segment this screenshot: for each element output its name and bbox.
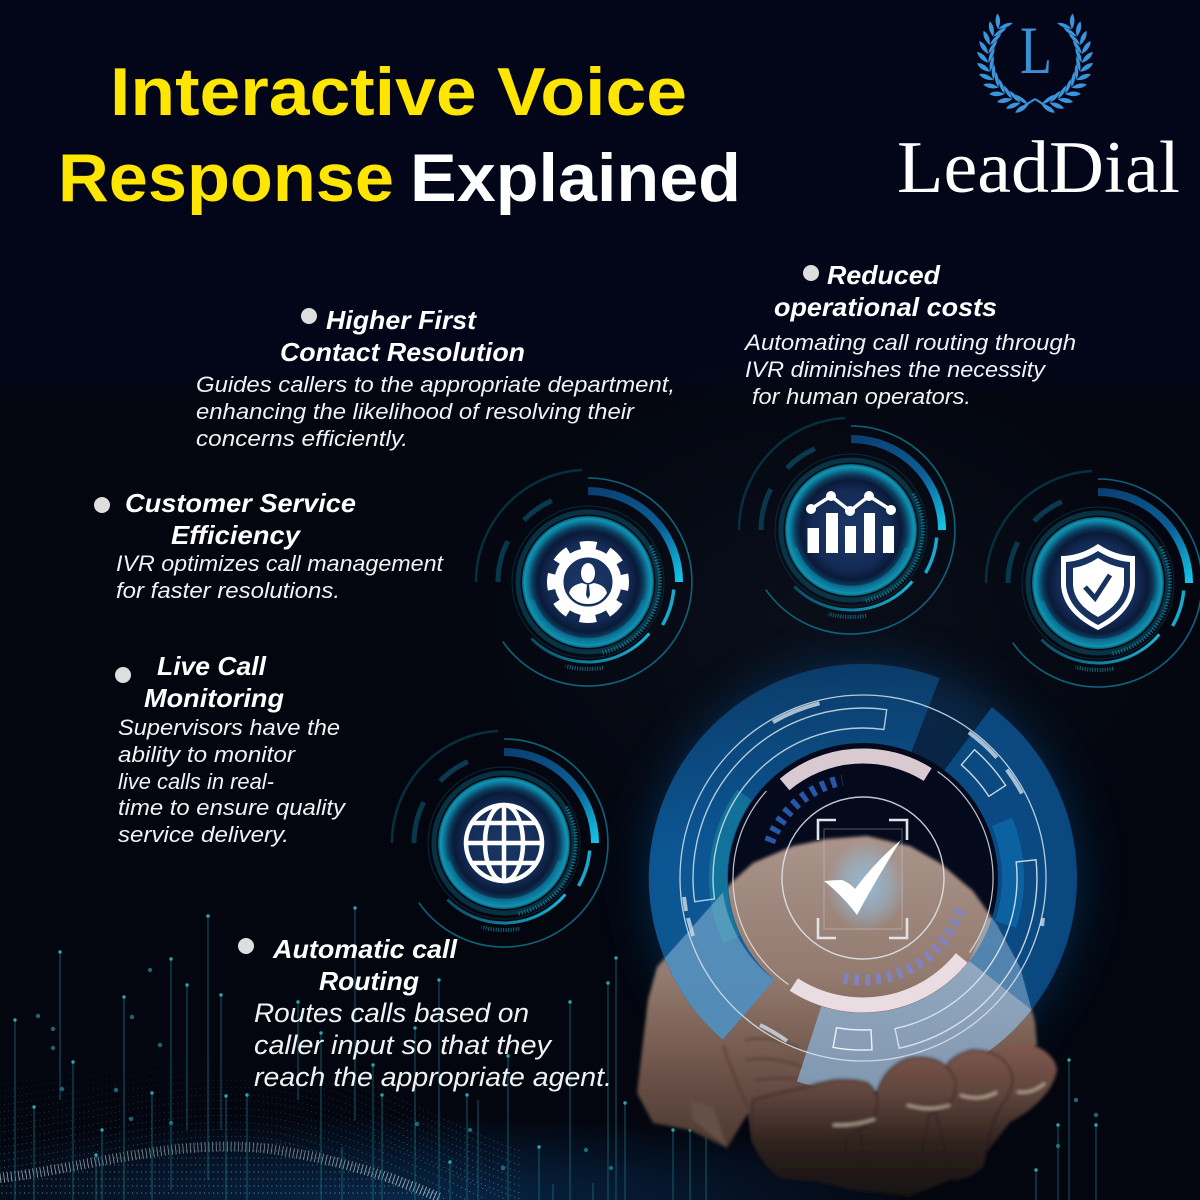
text block: Automatic call Routing: [238, 934, 612, 1092]
text block: Reduced operational costs: [743, 260, 1076, 409]
title: Interactive Voice: [110, 54, 687, 130]
text block: Reduced operational costs: operational costs: [774, 292, 997, 322]
text block: Live Call Monitoring: time to ensure quality: [118, 795, 347, 820]
text block: Automatic call Routing: Routing: [319, 966, 419, 996]
title: Explained: [410, 140, 741, 216]
icon: bar chart: [739, 418, 955, 634]
hand: fingers: [751, 1043, 1057, 1197]
particle wave: [0, 1052, 520, 1199]
text block: Automatic call Routing: Routes calls based on: [254, 998, 529, 1028]
text block: Live Call Monitoring: [115, 651, 347, 847]
text block: Automatic call Routing: reach the appropriate agent.: [254, 1062, 612, 1092]
text block: Reduced operational costs: IVR diminishes the necessity: [745, 357, 1047, 382]
text block: Live Call Monitoring: live calls in real-: [118, 769, 274, 794]
scanner frame: [818, 820, 907, 938]
text block: Customer Service Efficiency: [94, 488, 445, 603]
text block: Live Call Monitoring: Supervisors have the: [118, 715, 340, 740]
text block: Customer Service Efficiency: for faster resolutions.: [116, 578, 340, 603]
title: Response: [58, 140, 394, 216]
data lines: [13, 906, 1098, 1200]
text block: Higher First Contact Resolution: Guides callers to the appropriate department,: [196, 372, 675, 397]
logo: LeadDial: L: [1020, 12, 1052, 88]
text block: Live Call Monitoring: Live Call: [157, 651, 267, 681]
text block: Higher First Contact Resolution: enhancing the likelihood of resolving their: [196, 399, 636, 424]
logo: LeadDial: [897, 12, 1180, 209]
rings and arcs: [680, 695, 1046, 1061]
hand: palm and thumb: [637, 836, 1037, 1148]
text block: Reduced operational costs: Automating call routing through: [743, 330, 1076, 355]
text block: Higher First Contact Resolution: [196, 305, 675, 451]
text block: Live Call Monitoring: Monitoring: [144, 683, 284, 713]
HUD glow: [645, 660, 1081, 1096]
logo: LeadDial: LeadDial: [897, 127, 1180, 209]
text block: Live Call Monitoring: service delivery.: [118, 822, 289, 847]
text block: Customer Service Efficiency: Customer Service: [125, 488, 356, 518]
text block: Customer Service Efficiency: Efficiency: [171, 520, 302, 550]
icon: shield with check: [986, 471, 1200, 687]
central HUD with check mark: [649, 664, 1077, 1092]
text block: Higher First Contact Resolution: Contact Resolution: [280, 337, 525, 367]
icon: gear with person: [476, 470, 692, 686]
title: [58, 54, 741, 216]
text block: Live Call Monitoring: ability to monitor: [118, 742, 297, 767]
text block: Automatic call Routing: caller input so that they: [254, 1030, 553, 1060]
text block: Automatic call Routing: Automatic call: [272, 934, 458, 964]
text block: Customer Service Efficiency: IVR optimizes call management: [116, 551, 445, 576]
text block: Reduced operational costs: for human operators.: [752, 384, 971, 409]
icon: globe: [392, 731, 608, 947]
text block: Higher First Contact Resolution: concerns efficiently.: [196, 426, 408, 451]
icon: check mark: [824, 840, 901, 915]
text block: Reduced operational costs: Reduced: [827, 260, 941, 290]
blue bands: [649, 664, 1077, 1092]
light overlay on hand: [649, 780, 1077, 1040]
text block: Higher First Contact Resolution: Higher First: [326, 305, 477, 335]
